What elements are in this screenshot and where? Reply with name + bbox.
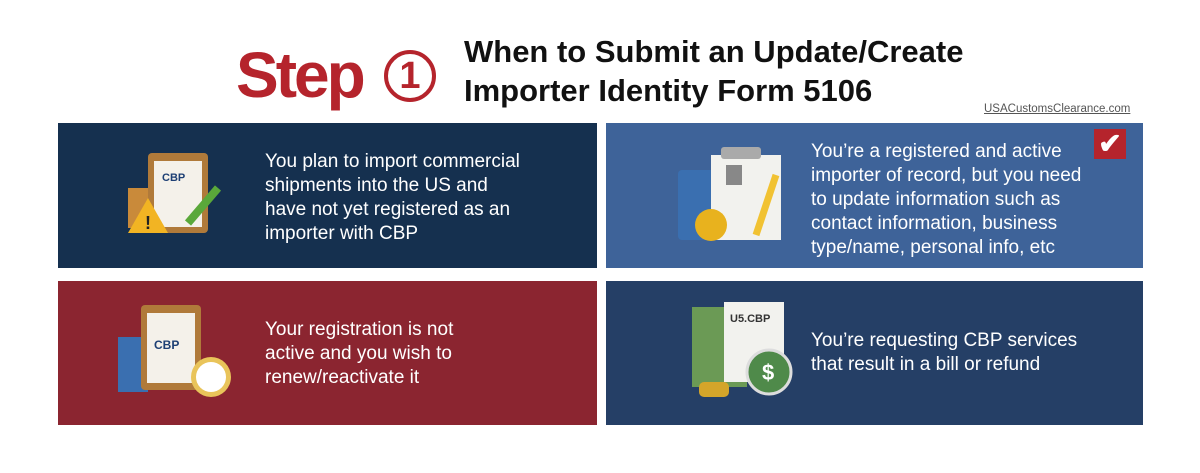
text block: importer with CBP (265, 223, 418, 244)
icon: clipboard with clock (118, 305, 231, 397)
icon: money and document (692, 302, 792, 397)
icon: circled one: 1 (399, 55, 421, 97)
panel: bill or refund (606, 281, 1143, 425)
text block: that result in a bill or refund (811, 354, 1040, 375)
panel: not yet registered (58, 123, 597, 268)
icon: money and document: $ (762, 360, 774, 385)
text block: Your registration is not (265, 319, 453, 340)
icon: checkmark: ✔ (1098, 128, 1122, 159)
text block: importer of record, but you need (811, 165, 1081, 186)
text block: You plan to import commercial (265, 151, 520, 172)
icon: clipboard with clock: CBP (154, 338, 179, 352)
text block (811, 330, 1077, 375)
source link: USACustomsClearance.com (984, 103, 1130, 115)
text block: to update information such as (811, 189, 1060, 210)
heading: form title (464, 34, 963, 108)
icon: circled one (384, 50, 436, 102)
panel: reactivate (58, 281, 597, 425)
text block (811, 141, 1081, 258)
icon: clipboard warning: CBP (162, 172, 185, 184)
icon: documents with gear (678, 147, 781, 241)
text block: You’re requesting CBP services (811, 330, 1077, 351)
icon: clipboard warning: ! (145, 213, 151, 233)
text block: contact information, business (811, 213, 1057, 234)
icon: clipboard warning (128, 153, 221, 233)
icon: money and document: U5.CBP (730, 313, 770, 325)
text block: have not yet registered as an (265, 199, 510, 220)
heading: form title: When to Submit an Update/Create (464, 34, 963, 69)
text block: shipments into the US and (265, 175, 488, 196)
text block (265, 319, 454, 388)
heading: Step: Step (236, 39, 363, 111)
text block (265, 151, 520, 244)
text block: You’re a registered and active (811, 141, 1062, 162)
text block: type/name, personal info, etc (811, 237, 1055, 258)
text block: renew/reactivate it (265, 367, 419, 388)
text block: active and you wish to (265, 343, 452, 364)
panel: update information (606, 123, 1143, 268)
heading: form title: Importer Identity Form 5106 (464, 73, 872, 108)
title: Step 1 (236, 39, 436, 111)
